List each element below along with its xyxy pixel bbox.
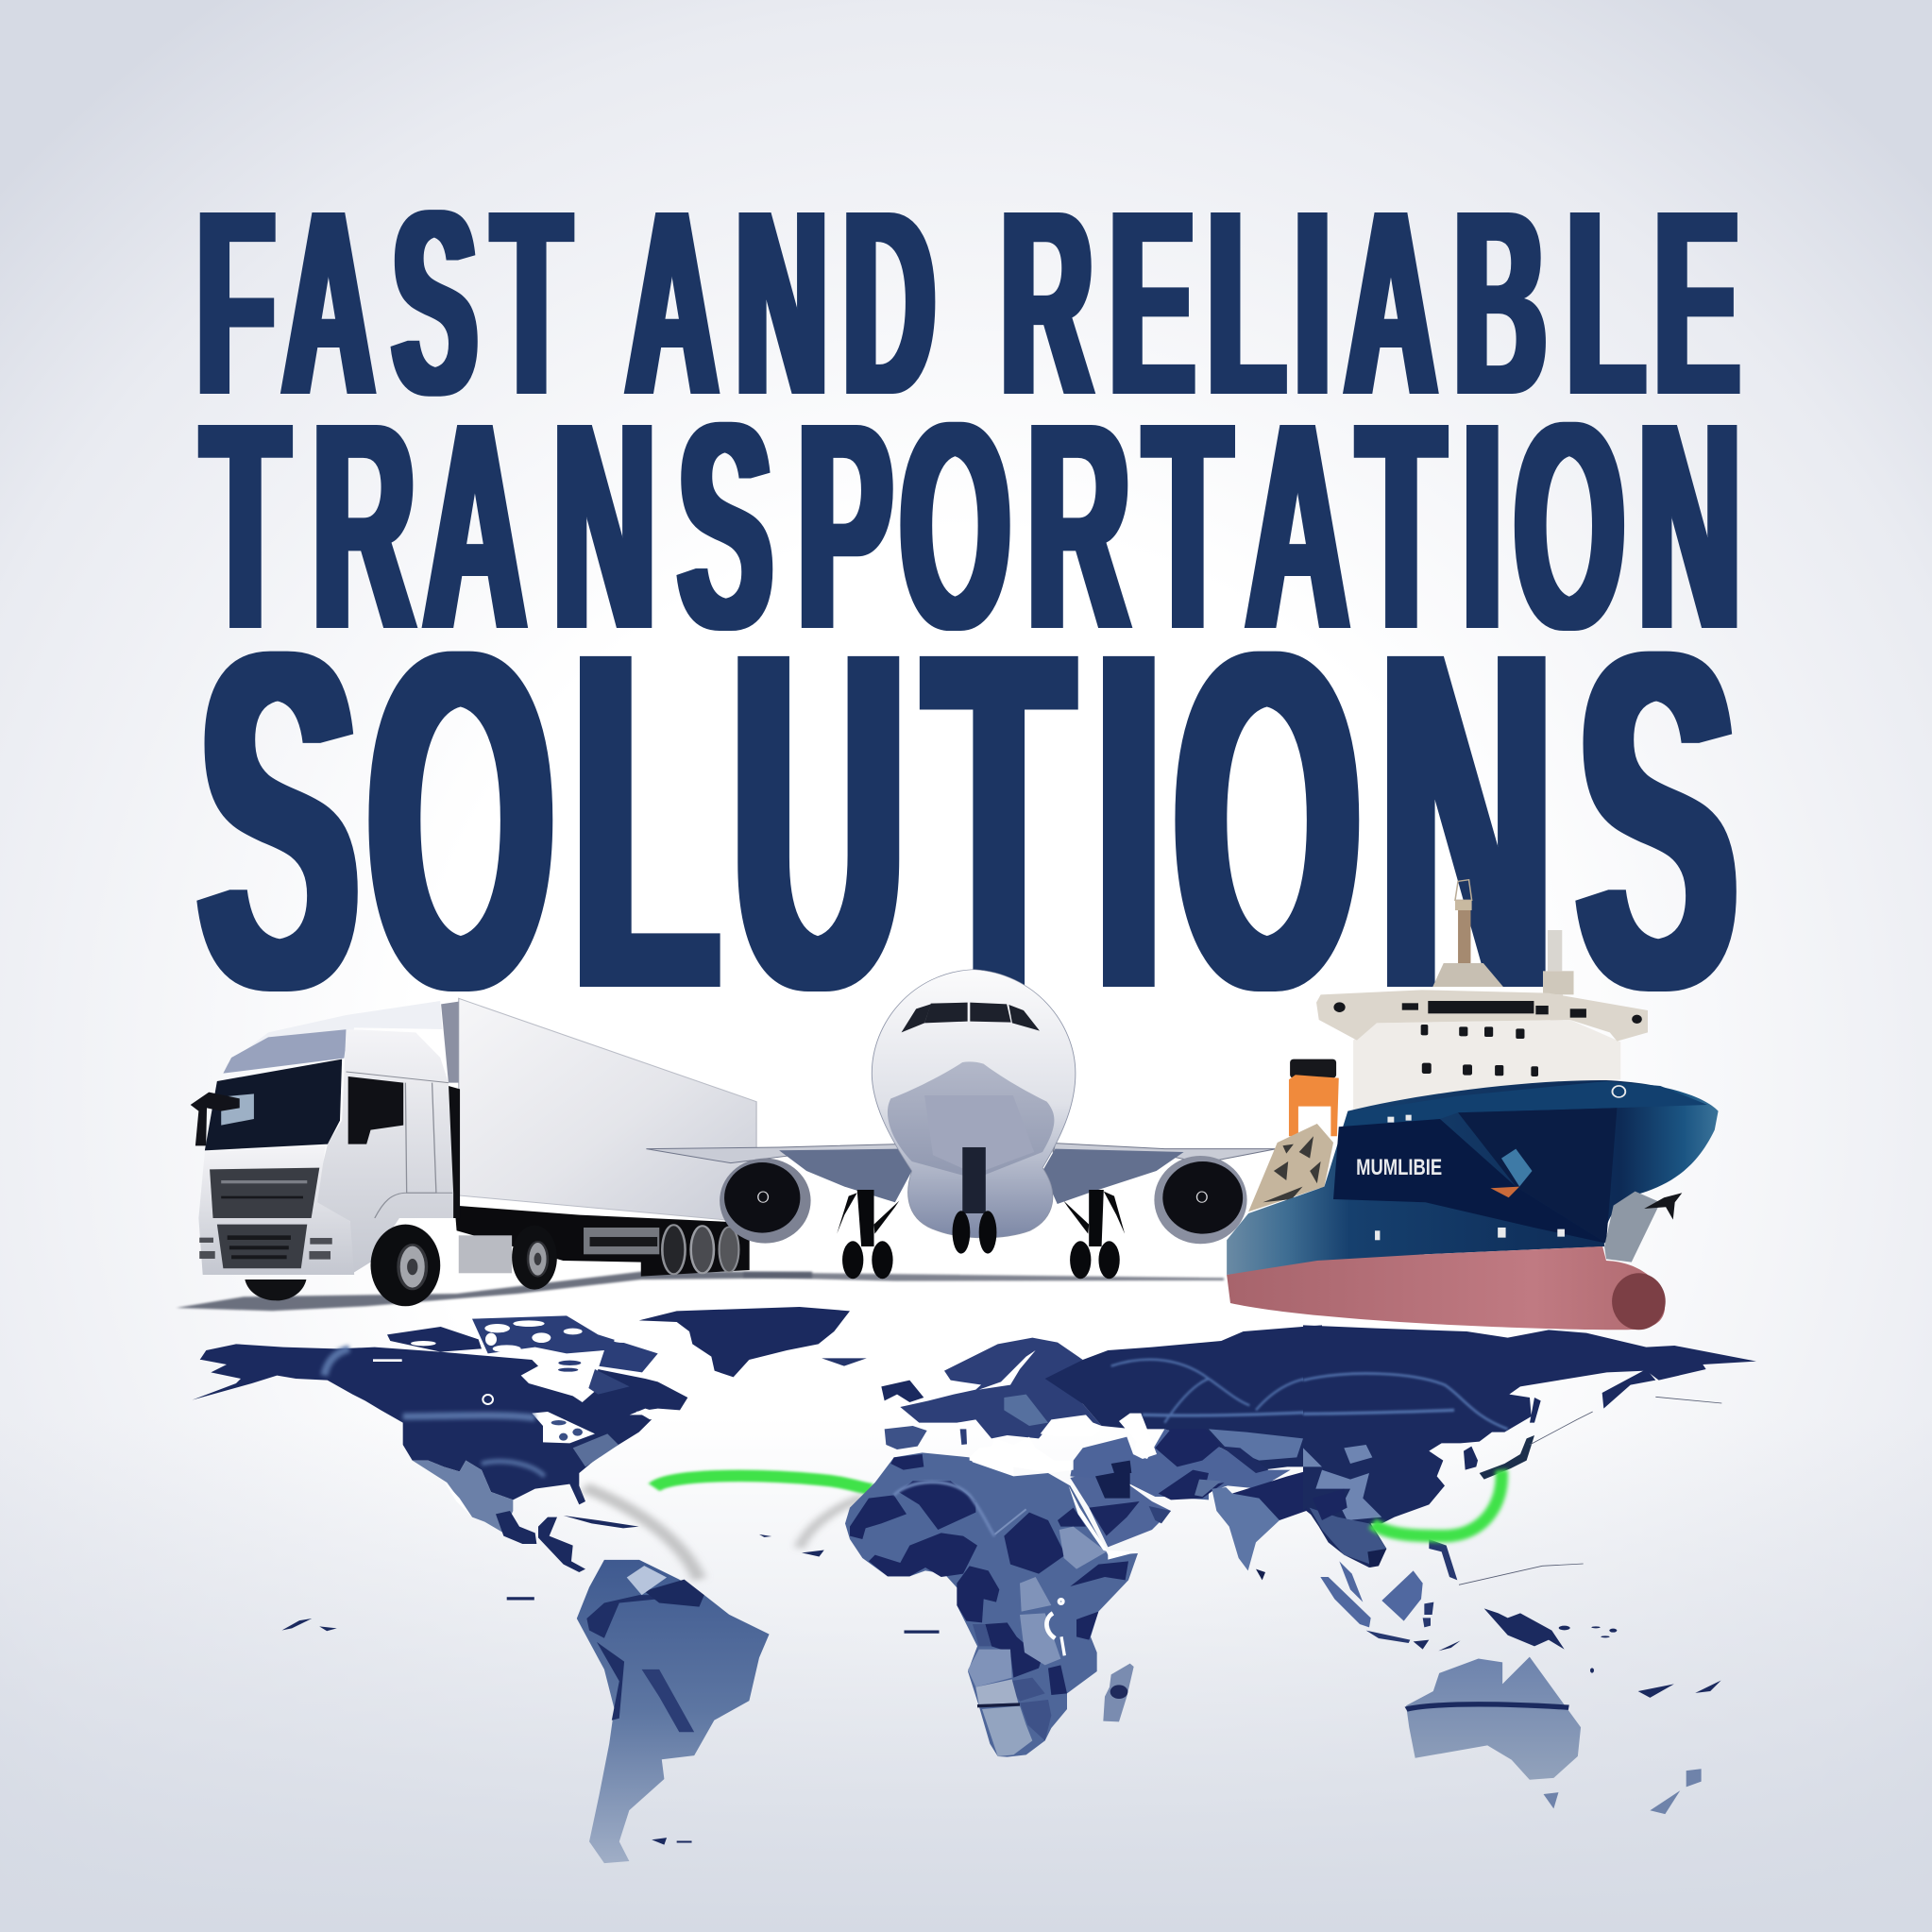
light stripe and glowing arc <box>894 1483 1026 1536</box>
Russia west <box>1042 1325 1322 1470</box>
Russia east and China <box>1303 1325 1756 1568</box>
crane <box>1289 1059 1339 1136</box>
Sri Lanka <box>1256 1569 1265 1580</box>
cockpit windows <box>902 1003 1040 1032</box>
Tibet light patches <box>1303 1445 1381 1520</box>
drive wheel <box>512 1226 557 1290</box>
glowing routes <box>1303 1374 1508 1429</box>
lakes <box>1046 1600 1064 1655</box>
airplane <box>646 970 1277 1281</box>
central blue Asia <box>1070 1429 1291 1500</box>
portholes <box>1421 1025 1538 1076</box>
front right wheel <box>371 1225 440 1306</box>
truck <box>177 998 812 1311</box>
front left wheel <box>245 1280 306 1300</box>
nose panel <box>924 1095 1034 1174</box>
Arctic islands <box>387 1315 658 1372</box>
title line: TRANSPORTATION: TRANSPORTATION <box>202 361 1741 690</box>
Iberia <box>885 1426 927 1449</box>
left wing <box>646 1144 912 1202</box>
Cuba <box>564 1516 639 1528</box>
fuselage <box>872 970 1076 1238</box>
Yucatan <box>496 1511 536 1544</box>
cab side <box>314 1029 453 1275</box>
Hudson islands <box>558 1361 581 1372</box>
ship name: MUMLIBIE <box>1356 1156 1442 1180</box>
Europe <box>900 1338 1102 1438</box>
title line: FAST AND RELIABLE: FAST AND RELIABLE <box>197 157 1739 450</box>
New Guinea <box>1484 1608 1565 1650</box>
Arabia <box>1070 1461 1171 1547</box>
Bangladesh and Myanmar <box>1232 1466 1322 1523</box>
anchor left <box>1501 1149 1533 1187</box>
Central America <box>538 1517 585 1572</box>
Sakhalin <box>1530 1398 1541 1423</box>
dark hull panel <box>1333 1119 1606 1244</box>
Iceland <box>822 1358 867 1366</box>
lower bow <box>1604 1192 1660 1263</box>
Greenland <box>639 1307 850 1377</box>
southern Africa light panels <box>975 1679 1032 1756</box>
United Kingdom <box>881 1381 924 1402</box>
Gulf of California <box>444 1481 472 1517</box>
map: Africa <box>845 1452 1138 1757</box>
radar mast <box>1543 930 1574 1080</box>
cab roof <box>223 1001 442 1074</box>
Indochina <box>1310 1489 1386 1568</box>
map: North America <box>192 1315 687 1572</box>
windshield <box>205 1059 342 1150</box>
rear wheels <box>662 1225 738 1274</box>
trailer underside <box>454 1206 750 1277</box>
Caspian Sea <box>1119 1414 1157 1459</box>
upper hull band <box>1345 1081 1707 1127</box>
side mirror <box>191 1093 240 1145</box>
bridge wings <box>1316 990 1648 1042</box>
runway shadow <box>743 1272 1224 1281</box>
Australia <box>1406 1657 1581 1780</box>
hull markings <box>1375 1086 1625 1240</box>
Gulf of Aden <box>1108 1551 1138 1560</box>
right wing <box>1042 1144 1277 1204</box>
fuel tank <box>459 1235 512 1273</box>
Baltic Sea <box>979 1350 1036 1390</box>
shipping route: Asia Pacific green arc <box>1372 1470 1501 1536</box>
mid blue patches <box>973 1624 1051 1740</box>
Korea <box>1464 1447 1478 1470</box>
Black Sea <box>1041 1415 1100 1437</box>
ground shadow <box>177 1272 812 1311</box>
Southeast Asia islands <box>1320 1539 1461 1651</box>
bridge windows <box>1333 1001 1642 1024</box>
Pacific arcs <box>1638 1680 1721 1698</box>
cargo ship <box>1227 880 1719 1330</box>
India <box>1212 1485 1280 1570</box>
anchor right <box>1644 1193 1682 1220</box>
Mediterranean Sea <box>970 1437 1074 1476</box>
black band <box>977 1704 1020 1706</box>
red lower hull <box>1227 1246 1665 1330</box>
Mexico <box>413 1461 513 1533</box>
Great Lakes <box>532 1412 595 1443</box>
Red Sea <box>1069 1485 1108 1551</box>
main mast <box>1432 880 1503 987</box>
side window <box>348 1076 403 1144</box>
cab door lines <box>346 1072 452 1218</box>
lower nose <box>888 1061 1054 1178</box>
Gulf of St Lawrence <box>630 1409 661 1419</box>
blue hull <box>1227 1080 1719 1275</box>
Africa landmass <box>845 1452 1138 1757</box>
Madagascar <box>1103 1664 1134 1721</box>
right engine <box>1154 1156 1247 1244</box>
light country patches <box>968 1527 1107 1687</box>
James Bay region <box>588 1369 630 1395</box>
right main gear <box>1063 1190 1125 1279</box>
windshield light pane <box>221 1093 254 1126</box>
cab rear panel <box>449 1086 460 1218</box>
superstructure <box>1353 1020 1620 1111</box>
Central Asia dark <box>1155 1429 1221 1466</box>
central Europe light patch <box>1004 1395 1048 1426</box>
Kamchatka <box>1602 1369 1655 1409</box>
glowing routes over Russia <box>1111 1360 1322 1423</box>
map: East Asia and Pacific <box>1303 1325 1756 1673</box>
Tibet light band <box>1209 1429 1303 1461</box>
Iran <box>1159 1470 1225 1500</box>
Pacific thin lines <box>1459 1397 1721 1585</box>
map: Australia and islands <box>1406 1657 1721 1814</box>
bulbous bow <box>1612 1273 1666 1330</box>
map: Europe and Western Asia <box>881 1325 1322 1580</box>
trailer box <box>459 998 756 1223</box>
upper grille <box>210 1168 319 1218</box>
South America <box>577 1560 770 1863</box>
cab front <box>198 1145 354 1275</box>
lower grille <box>217 1225 307 1268</box>
Himalaya dark strip <box>1221 1447 1268 1473</box>
map: South America and Atlantic <box>282 1358 940 1863</box>
world map <box>192 1307 1756 1863</box>
eastern United States <box>573 1433 619 1466</box>
Canada and United States <box>192 1344 687 1504</box>
Japan <box>1480 1435 1534 1480</box>
deck cargo <box>1248 1124 1333 1212</box>
left engine <box>720 1159 811 1244</box>
Tasmania and New Zealand <box>1544 1769 1702 1814</box>
side skirt <box>584 1228 659 1254</box>
map marker and white detail <box>373 1359 493 1404</box>
Hudson Bay <box>521 1350 604 1402</box>
Pacific small islands <box>1559 1626 1617 1673</box>
dark country patches <box>850 1454 1128 1695</box>
Sardinia and Sicily <box>960 1429 967 1445</box>
dark bow panel <box>1458 1108 1617 1244</box>
nose gear <box>953 1147 996 1254</box>
glowing route across North America <box>324 1348 545 1476</box>
title line: SOLUTIONS: SOLUTIONS <box>198 553 1737 1090</box>
small islands <box>282 1534 940 1845</box>
shipping route: Atlantic green arc <box>654 1476 872 1489</box>
left main gear <box>837 1190 899 1279</box>
faded routes <box>585 1487 864 1580</box>
lake islands <box>551 1420 583 1441</box>
title <box>197 157 1741 1090</box>
headlights <box>199 1238 332 1260</box>
